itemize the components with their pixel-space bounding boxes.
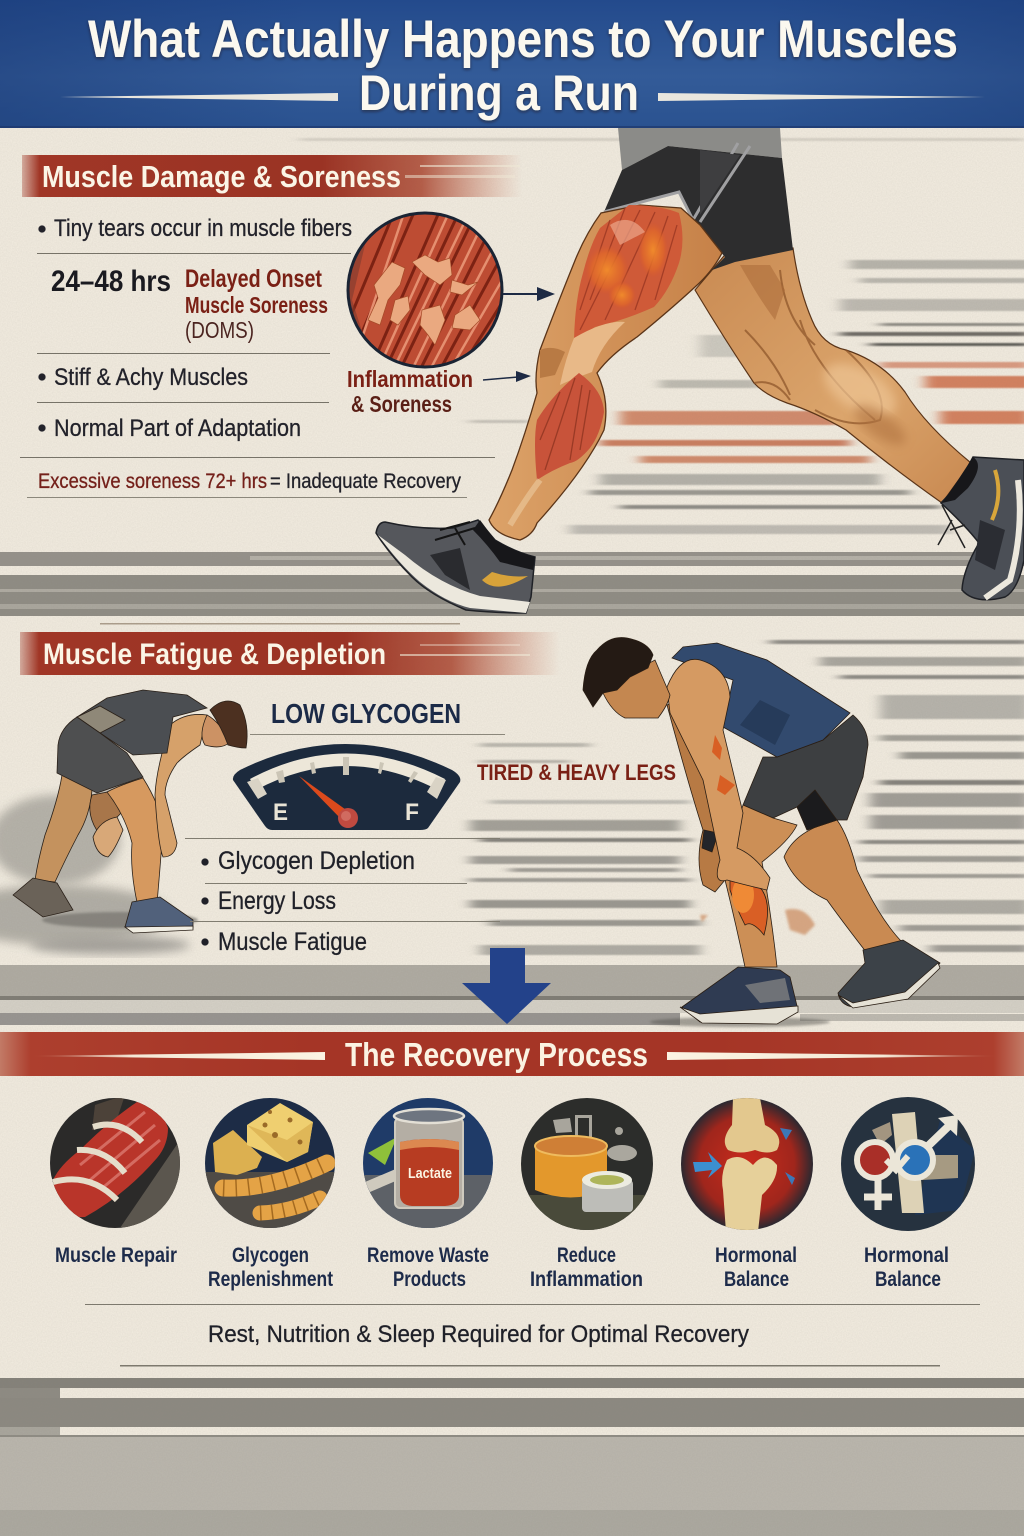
knee tendon — [560, 322, 625, 385]
down arrow — [462, 948, 551, 1024]
excessive soreness note — [20, 457, 495, 498]
icon: muscle repair — [50, 1098, 180, 1228]
section heading: muscle fatigue — [20, 632, 560, 675]
label: muscle repair: Muscle Repair — [55, 1244, 177, 1267]
footer bands — [0, 1378, 1024, 1536]
label: reduce inflammation: Reduce — [557, 1244, 616, 1267]
inflammation label: & Soreness — [351, 391, 452, 417]
excessive soreness note: = Inadequate Recovery — [270, 470, 461, 493]
icon: lactate beaker — [363, 1098, 493, 1228]
shorts — [604, 128, 793, 270]
large bent runner — [583, 638, 940, 1027]
label: remove waste: Remove Waste — [367, 1244, 489, 1267]
motion streaks: muscle damage section — [300, 138, 1024, 534]
header banner — [0, 0, 1024, 128]
DOMS timing: Delayed Onset — [185, 265, 323, 293]
icon: lactate beaker: Lactate — [408, 1165, 452, 1182]
recovery process banner — [0, 1032, 1024, 1076]
front leg — [489, 205, 722, 540]
damage bullets — [37, 215, 352, 442]
fuel gauge: E — [273, 799, 288, 826]
icon: knee joint — [681, 1098, 813, 1232]
shorts — [743, 715, 868, 830]
label: hormonal balance two — [864, 1244, 949, 1291]
label: hormonal balance one: Balance — [724, 1268, 789, 1291]
DOMS timing: (DOMS) — [185, 317, 254, 343]
section heading: muscle damage — [22, 155, 522, 197]
damage bullets: Tiny tears occur in muscle fibers — [54, 215, 352, 242]
calf injury — [730, 873, 768, 935]
label: reduce inflammation — [530, 1244, 643, 1291]
label: hormonal balance one: Hormonal — [715, 1244, 797, 1267]
inflammation label — [347, 366, 473, 417]
thigh muscle — [574, 205, 682, 340]
near arm with hand — [667, 659, 770, 890]
tired legs label: TIRED & HEAVY LEGS — [477, 760, 676, 785]
tank top — [672, 643, 850, 757]
DOMS timing: Muscle Soreness — [185, 292, 328, 318]
label: glycogen — [208, 1244, 333, 1291]
fatigue bullets: Glycogen Depletion — [218, 847, 415, 875]
label: remove waste — [367, 1244, 489, 1291]
icon: reduce inflammation — [520, 1098, 654, 1235]
rear leg — [695, 248, 971, 503]
fatigue bullets — [185, 838, 500, 956]
rear shoe — [938, 457, 1024, 600]
arrow: inflammation to calf — [483, 371, 531, 382]
arrow: inset to thigh — [503, 287, 555, 301]
face — [603, 660, 670, 718]
damage bullets: Normal Part of Adaptation — [54, 415, 301, 442]
label: hormonal balance one — [715, 1244, 797, 1291]
damage bullets: Stiff & Achy Muscles — [54, 364, 248, 391]
blood wash beside runner — [700, 909, 815, 935]
grey road wash: fatigue section — [0, 777, 1024, 1025]
title rule right — [658, 93, 985, 101]
label: remove waste: Products — [393, 1268, 466, 1291]
rear leg — [784, 820, 903, 957]
road band upper — [0, 552, 1024, 624]
calf muscle — [535, 373, 604, 480]
front shoe — [682, 967, 798, 1023]
fuel gauge: F — [405, 799, 419, 826]
front shoe — [376, 520, 535, 613]
excessive soreness note: Excessive soreness 72+ hrs — [38, 470, 267, 493]
DOMS timing: 24–48 hrs — [51, 265, 171, 298]
label: reduce inflammation: Inflammation — [530, 1268, 643, 1291]
inset: torn muscle fibers — [345, 210, 510, 370]
label: hormonal balance two: Hormonal — [864, 1244, 949, 1267]
recovery note: Rest, Nutrition & Sleep Required for Optimal Recovery — [208, 1321, 749, 1348]
DOMS timing — [51, 265, 328, 343]
thigh and lower leg — [725, 805, 797, 967]
title: During a Run — [359, 65, 639, 121]
small bent runner — [13, 690, 247, 933]
low glycogen label: LOW GLYCOGEN — [271, 698, 461, 729]
section heading: muscle damage: Muscle Damage & Soreness — [42, 159, 401, 194]
label: hormonal balance two: Balance — [875, 1268, 941, 1291]
label: glycogen: Glycogen — [232, 1244, 309, 1267]
icon: hormone symbols — [841, 1097, 975, 1231]
hair — [583, 638, 653, 707]
motion streaks: fatigue section — [470, 640, 1024, 955]
icon: glycogen — [200, 1098, 340, 1232]
title — [88, 10, 958, 121]
section heading: muscle fatigue: Muscle Fatigue & Depletion — [43, 638, 386, 671]
fatigue bullets: Muscle Fatigue — [218, 928, 367, 956]
rear shoe — [838, 940, 940, 1007]
fuel gauge — [233, 734, 505, 830]
recovery process banner: The Recovery Process — [345, 1036, 648, 1073]
title rule left — [60, 93, 338, 101]
inflammation label: Inflammation — [347, 366, 473, 392]
label: glycogen: Replenishment — [208, 1268, 333, 1291]
fatigue bullets: Energy Loss — [218, 887, 336, 915]
far arm — [667, 700, 725, 892]
